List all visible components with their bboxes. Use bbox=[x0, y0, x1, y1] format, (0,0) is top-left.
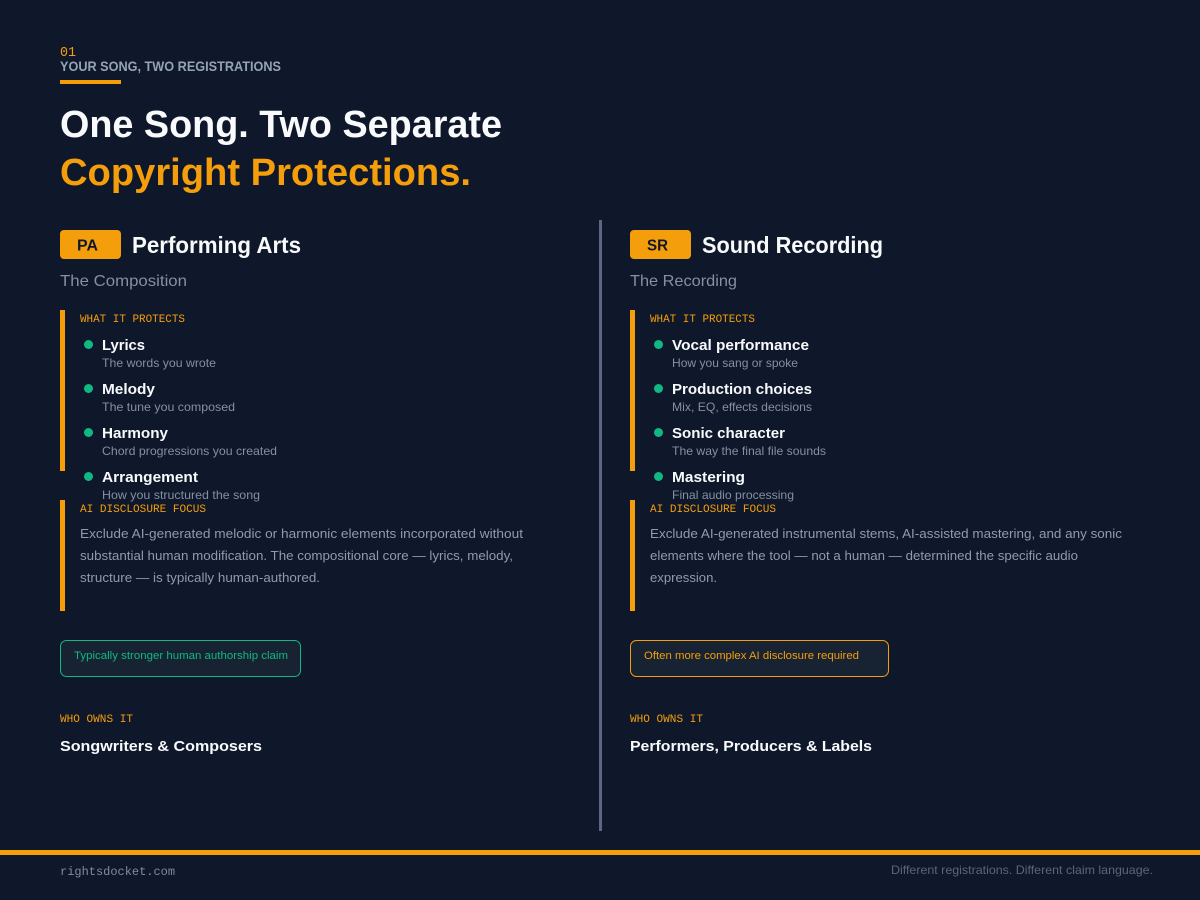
SR heading: Sound Recording bbox=[702, 232, 883, 258]
panel: Performing Arts bbox=[60, 230, 523, 755]
SR callout pill: Often more complex AI disclosure required bbox=[644, 650, 859, 662]
PA what it protects label: WHAT IT PROTECTS bbox=[80, 314, 185, 326]
SR item: Sonic character bbox=[654, 425, 826, 458]
SR item: Production choices bbox=[654, 381, 812, 414]
SR item: Mastering: Final audio processing bbox=[672, 488, 794, 502]
SR item: Vocal performance: How you sang or spoke bbox=[672, 356, 798, 370]
SR who owns it label: WHO OWNS IT bbox=[630, 714, 703, 726]
PA item: Lyrics: Lyrics bbox=[102, 337, 145, 354]
title: Copyright Protections. bbox=[60, 152, 471, 194]
PA heading: Performing Arts bbox=[132, 232, 301, 258]
PA AI disclosure text: Exclude AI-generated melodic or harmonic elements incorporated without bbox=[80, 526, 523, 541]
SR what it protects accent bar bbox=[630, 310, 635, 471]
PA badge bbox=[60, 230, 121, 259]
SR item: Vocal performance: Vocal performance bbox=[672, 337, 809, 354]
SR item: Mastering bbox=[654, 469, 794, 502]
accent underline bbox=[60, 80, 121, 84]
PA item: Harmony: Chord progressions you created bbox=[102, 444, 277, 458]
SR item: Sonic character: The way the final file sounds bbox=[672, 444, 826, 458]
PA AI disclosure label: AI DISCLOSURE FOCUS bbox=[80, 504, 206, 516]
SR badge bbox=[630, 230, 691, 259]
PA AI disclosure text: substantial human modification. The compositional core — lyrics, melody, bbox=[80, 548, 513, 563]
PA callout pill: Typically stronger human authorship claim bbox=[74, 650, 288, 662]
PA AI disclosure accent bar bbox=[60, 500, 65, 611]
PA item: Melody: Melody bbox=[102, 381, 156, 398]
SR item: Sonic character: Sonic character bbox=[672, 425, 785, 442]
title bbox=[60, 104, 502, 194]
SR AI disclosure text bbox=[650, 526, 1123, 585]
SR AI disclosure text: expression. bbox=[650, 570, 717, 585]
PA item: Lyrics: The words you wrote bbox=[102, 356, 216, 370]
PA item: Lyrics bbox=[84, 337, 216, 370]
SR AI disclosure accent bar bbox=[630, 500, 635, 611]
PA item: Harmony: Harmony bbox=[102, 425, 169, 442]
PA badge: PA bbox=[77, 238, 98, 254]
PA who owns it label: WHO OWNS IT bbox=[60, 714, 133, 726]
PA item: Arrangement: Arrangement bbox=[102, 469, 198, 486]
PA item: Harmony bbox=[84, 425, 277, 458]
SR what it protects label: WHAT IT PROTECTS bbox=[650, 314, 755, 326]
SR item: Vocal performance bbox=[654, 337, 809, 370]
PA item: Arrangement bbox=[84, 469, 260, 502]
PA item: Melody: The tune you composed bbox=[102, 400, 235, 414]
PA AI disclosure text bbox=[80, 526, 523, 585]
column divider bbox=[599, 220, 602, 831]
PA subtitle: The Composition bbox=[60, 273, 187, 290]
header block bbox=[60, 45, 502, 194]
title: One Song. Two Separate bbox=[60, 104, 502, 146]
PA item: Melody bbox=[84, 381, 235, 414]
PA callout pill bbox=[60, 640, 300, 676]
section number: 01 bbox=[60, 45, 76, 61]
PA owners: Songwriters & Composers bbox=[60, 738, 262, 755]
PA item: Arrangement: How you structured the song bbox=[102, 488, 260, 502]
PA what it protects accent bar bbox=[60, 310, 65, 471]
SR AI disclosure label: AI DISCLOSURE FOCUS bbox=[650, 504, 776, 516]
footer bbox=[0, 850, 1200, 879]
eyebrow label: YOUR SONG, TWO REGISTRATIONS bbox=[60, 58, 281, 74]
SR subtitle: The Recording bbox=[630, 273, 737, 290]
SR item: Mastering: Mastering bbox=[672, 469, 745, 486]
PA AI disclosure text: structure — is typically human-authored. bbox=[80, 570, 320, 585]
footer tagline: Different registrations. Different claim language. bbox=[891, 863, 1153, 877]
SR item: Production choices: Production choices bbox=[672, 381, 812, 398]
SR AI disclosure text: Exclude AI-generated instrumental stems, AI-assisted mastering, and any sonic bbox=[650, 526, 1123, 541]
SR callout pill bbox=[630, 640, 888, 676]
footer site name: rightsdocket.com bbox=[60, 865, 175, 879]
SR badge: SR bbox=[647, 238, 668, 254]
SR item: Production choices: Mix, EQ, effects decisions bbox=[672, 400, 812, 414]
panel: Sound Recording bbox=[630, 230, 1123, 755]
SR owners: Performers, Producers & Labels bbox=[630, 738, 872, 755]
SR AI disclosure text: elements where the tool — not a human — determined the specific audio bbox=[650, 548, 1078, 563]
footer accent rule bbox=[0, 850, 1200, 855]
